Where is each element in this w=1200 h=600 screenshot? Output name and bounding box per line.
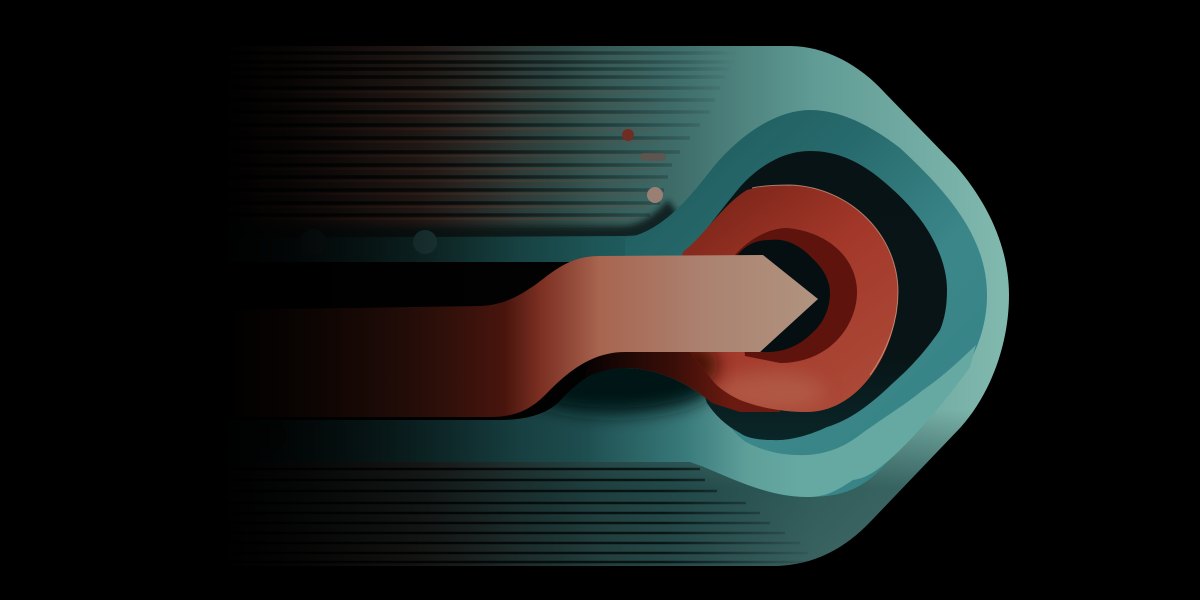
teal band left of ring (225, 232, 690, 262)
ball: lower faint (259, 422, 287, 450)
ball: teal dark (300, 229, 326, 255)
outer teal hull with stripes (225, 46, 1025, 570)
shadow between stripes and band (225, 200, 690, 242)
ring hole (735, 240, 830, 352)
red ring (660, 185, 898, 412)
lower light teal band and hump (305, 345, 976, 497)
red ring lower glow (690, 352, 822, 412)
ball: pale (647, 187, 663, 203)
left fade to black (200, 30, 600, 580)
arrow (225, 255, 818, 417)
ring highlight (752, 185, 898, 375)
abstract illustration: layered arrow inside rings (264, 46, 1009, 566)
ball: teal mid (413, 230, 437, 254)
teal ring (625, 110, 987, 497)
black gap around arrow (225, 262, 625, 422)
bar end: pale red tip (640, 153, 666, 161)
red ring body (660, 185, 898, 412)
ring inner bevel (735, 228, 857, 363)
dark tail behind ring top (700, 185, 790, 240)
dark red tail under arrow (585, 352, 780, 412)
dark ring interior (690, 151, 947, 440)
ball: red small (622, 129, 634, 141)
